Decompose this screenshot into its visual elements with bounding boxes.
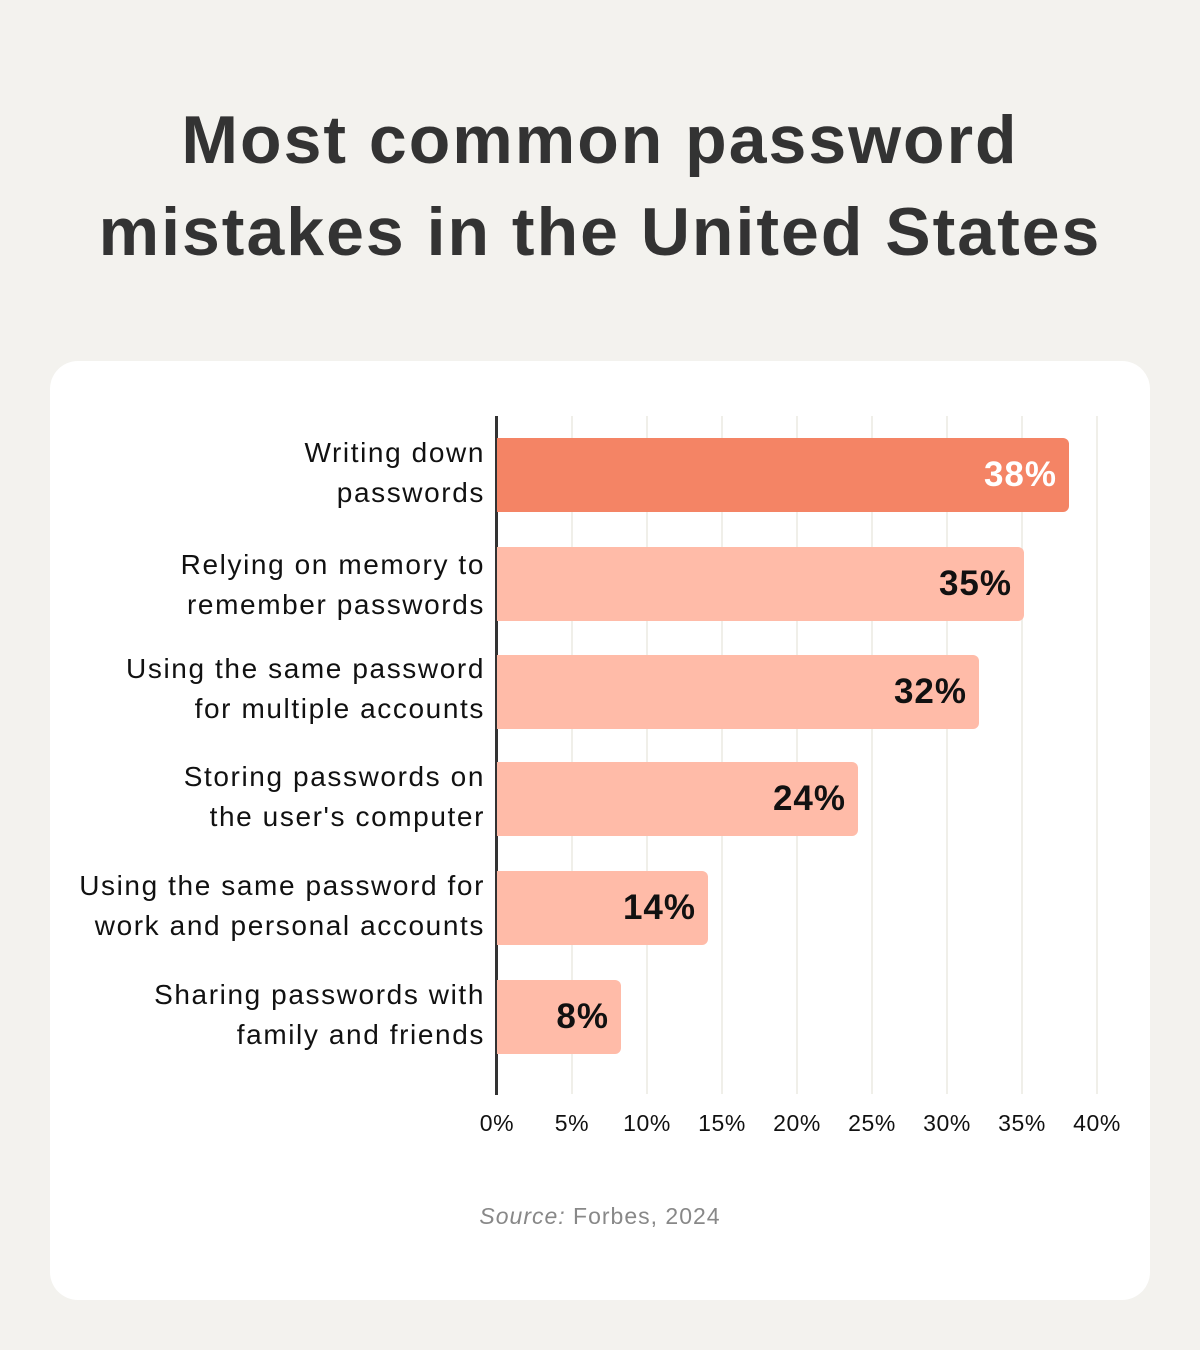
bar: same password [497,655,979,729]
bar: same password: 32% [894,672,967,711]
bar: writing down: 38% [984,455,1057,494]
y axis [495,416,498,1095]
x axis ticks: 10% [623,1110,671,1136]
label 2: remember passwords [187,589,485,620]
label 6 [154,979,485,1050]
label 4: Storing passwords on [184,761,485,792]
label 2: Relying on memory to [181,549,485,580]
x axis ticks: 5% [555,1110,589,1136]
x axis ticks: 0% [480,1110,514,1136]
title: mistakes in the United States [99,194,1101,270]
panel: chart card [50,361,1150,1300]
x axis ticks: 40% [1073,1110,1121,1136]
label 1: passwords [337,477,485,508]
label 6: family and friends [237,1019,485,1050]
bar: memory: 35% [939,564,1012,603]
bar: writing down [497,438,1069,512]
bar: storing [497,762,858,836]
bar: sharing [497,980,621,1054]
bar: sharing: 8% [556,997,609,1036]
x axis ticks: 15% [698,1110,746,1136]
label 2 [181,549,485,620]
label 6: Sharing passwords with [154,979,485,1010]
label 3: Using the same password [126,653,485,684]
label 4 [184,761,485,832]
bar: work and personal [497,871,708,945]
label 5: Using the same password for [79,870,485,901]
x axis ticks: 30% [923,1110,971,1136]
label 3: for multiple accounts [195,693,485,724]
title [99,102,1101,270]
x axis ticks: 35% [998,1110,1046,1136]
title: Most common password [181,102,1019,178]
bar: storing: 24% [773,779,846,818]
label 1: Writing down [304,437,485,468]
label 5 [79,870,485,941]
bar: memory [497,547,1024,621]
label 4: the user's computer [210,801,485,832]
label 1 [304,437,485,508]
x axis ticks: 25% [848,1110,896,1136]
x axis ticks: 20% [773,1110,821,1136]
label 3 [126,653,485,724]
source: Source: Forbes, 2024 [479,1203,721,1229]
bar: work and personal: 14% [623,888,696,927]
label 5: work and personal accounts [95,910,485,941]
